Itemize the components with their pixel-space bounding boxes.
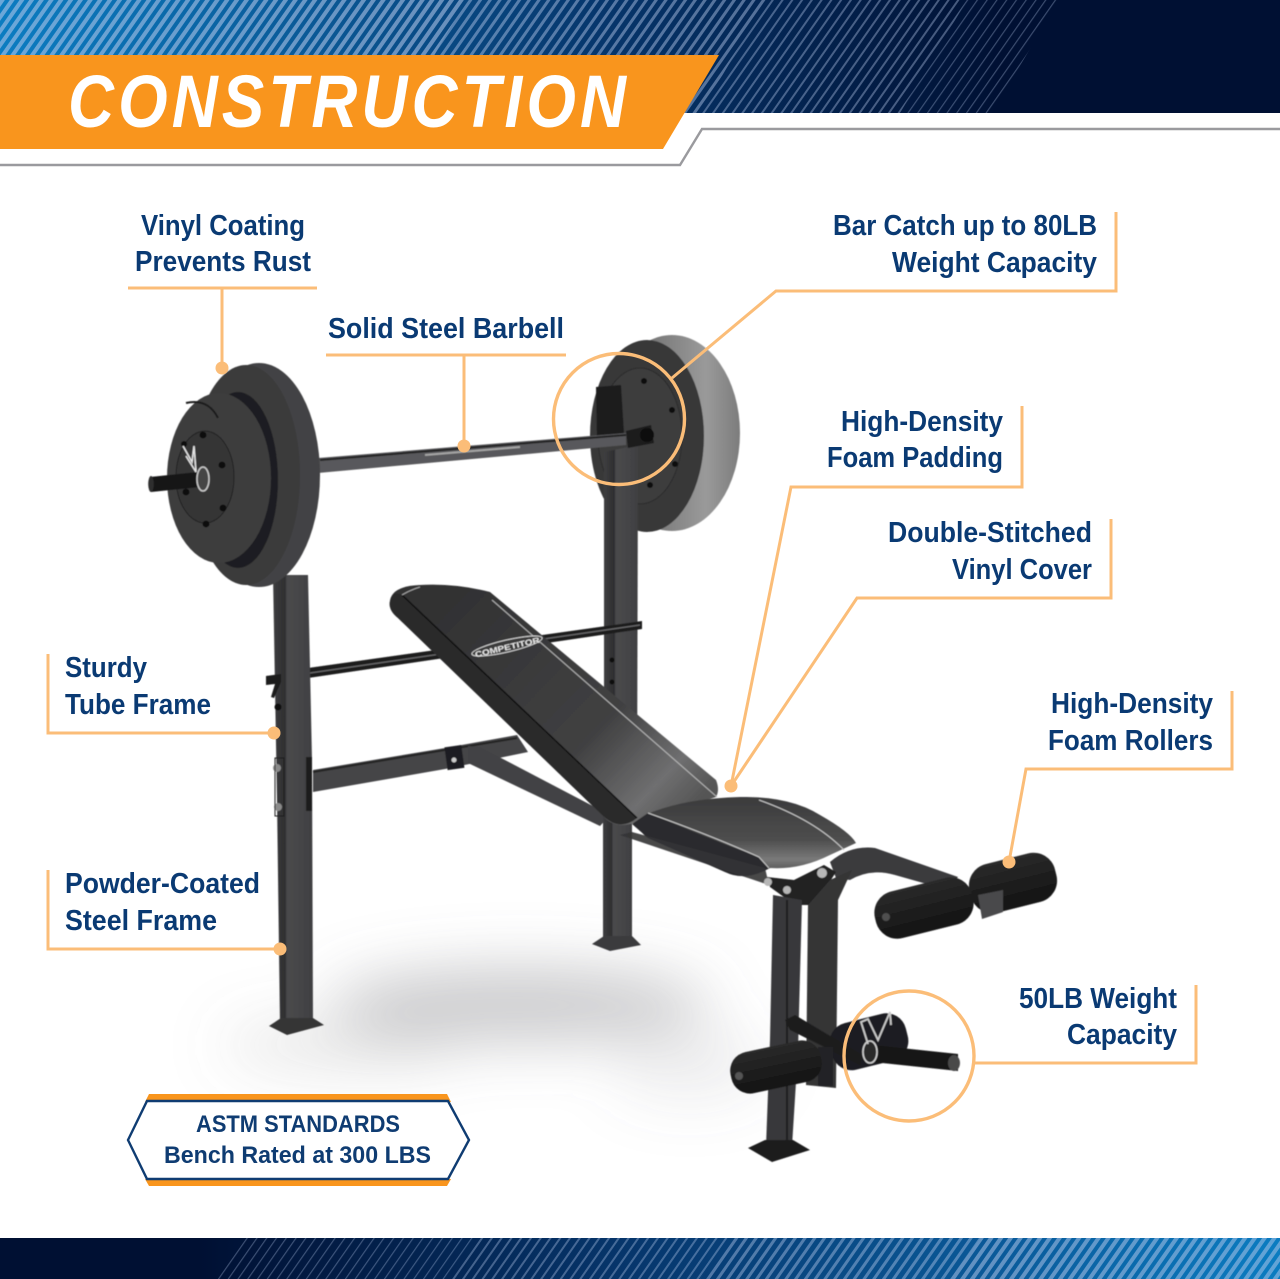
callout: foam padding bbox=[724, 406, 1022, 792]
callout: vinyl coating bbox=[128, 210, 317, 374]
callout: bar catch: Bar Catch up to 80LB bbox=[833, 210, 1097, 242]
callout: foam rollers bbox=[1002, 688, 1232, 868]
front support post under seat bbox=[592, 815, 641, 951]
astm badge bbox=[128, 1094, 469, 1186]
callout: tube frame: Tube Frame bbox=[65, 689, 211, 721]
header rule bbox=[0, 129, 1280, 165]
callout: bar catch: Weight Capacity bbox=[892, 247, 1097, 279]
callout: vinyl cover bbox=[731, 517, 1111, 786]
barbell bbox=[318, 425, 654, 473]
left upright bbox=[266, 575, 324, 1035]
callout: foam padding: High-Density bbox=[841, 406, 1003, 438]
callout: bar catch bbox=[554, 210, 1116, 484]
callout: steel frame: Powder-Coated bbox=[65, 868, 260, 900]
callout: steel frame: Steel Frame bbox=[65, 905, 217, 937]
callout: foam padding: Foam Padding bbox=[827, 442, 1003, 474]
callout: tube frame: Sturdy bbox=[65, 652, 147, 684]
frame tubes bbox=[313, 735, 610, 826]
callout: tube frame bbox=[48, 652, 280, 740]
callout: vinyl cover: Vinyl Cover bbox=[952, 554, 1092, 586]
callout: foam rollers: High-Density bbox=[1051, 688, 1213, 720]
callout: vinyl cover: Double-Stitched bbox=[888, 517, 1092, 549]
rear lower roller and pin bbox=[785, 1009, 960, 1086]
header band bbox=[0, 0, 1280, 113]
callout: foam rollers: Foam Rollers bbox=[1048, 725, 1213, 757]
footer band bbox=[0, 1238, 1280, 1279]
callout: solid steel barbell: Solid Steel Barbell bbox=[328, 313, 564, 345]
callout: steel frame bbox=[48, 868, 286, 956]
astm badge: ASTM STANDARDS bbox=[196, 1111, 400, 1138]
right upright bbox=[596, 385, 638, 815]
frame beneath seat bbox=[620, 832, 769, 885]
upper foam rollers bbox=[870, 848, 1062, 943]
astm badge: Bench Rated at 300 LBS bbox=[164, 1142, 431, 1169]
callout: vinyl coating: Prevents Rust bbox=[135, 246, 311, 278]
left weight plates bbox=[148, 363, 320, 587]
callout: 50lb capacity: Capacity bbox=[1067, 1019, 1177, 1051]
front legs bbox=[748, 870, 852, 1162]
callout: 50lb capacity: 50LB Weight bbox=[1019, 983, 1177, 1015]
floor shadow bbox=[220, 969, 770, 1100]
front lower roller bbox=[727, 1037, 825, 1097]
callout: solid steel barbell bbox=[326, 313, 566, 452]
callout: 50lb capacity bbox=[844, 983, 1196, 1121]
rear crossbar bbox=[308, 621, 642, 678]
title banner: CONSTRUCTION bbox=[68, 61, 630, 143]
back pad: COMPETITOR bbox=[474, 636, 541, 659]
back pad bbox=[390, 585, 718, 825]
title banner bbox=[0, 55, 719, 149]
seat pad bbox=[632, 797, 856, 876]
leg extension arm bbox=[764, 848, 958, 905]
right weight plate bbox=[590, 335, 740, 532]
bench photo illustration bbox=[148, 335, 1062, 1162]
callout: vinyl coating: Vinyl Coating bbox=[141, 210, 305, 242]
